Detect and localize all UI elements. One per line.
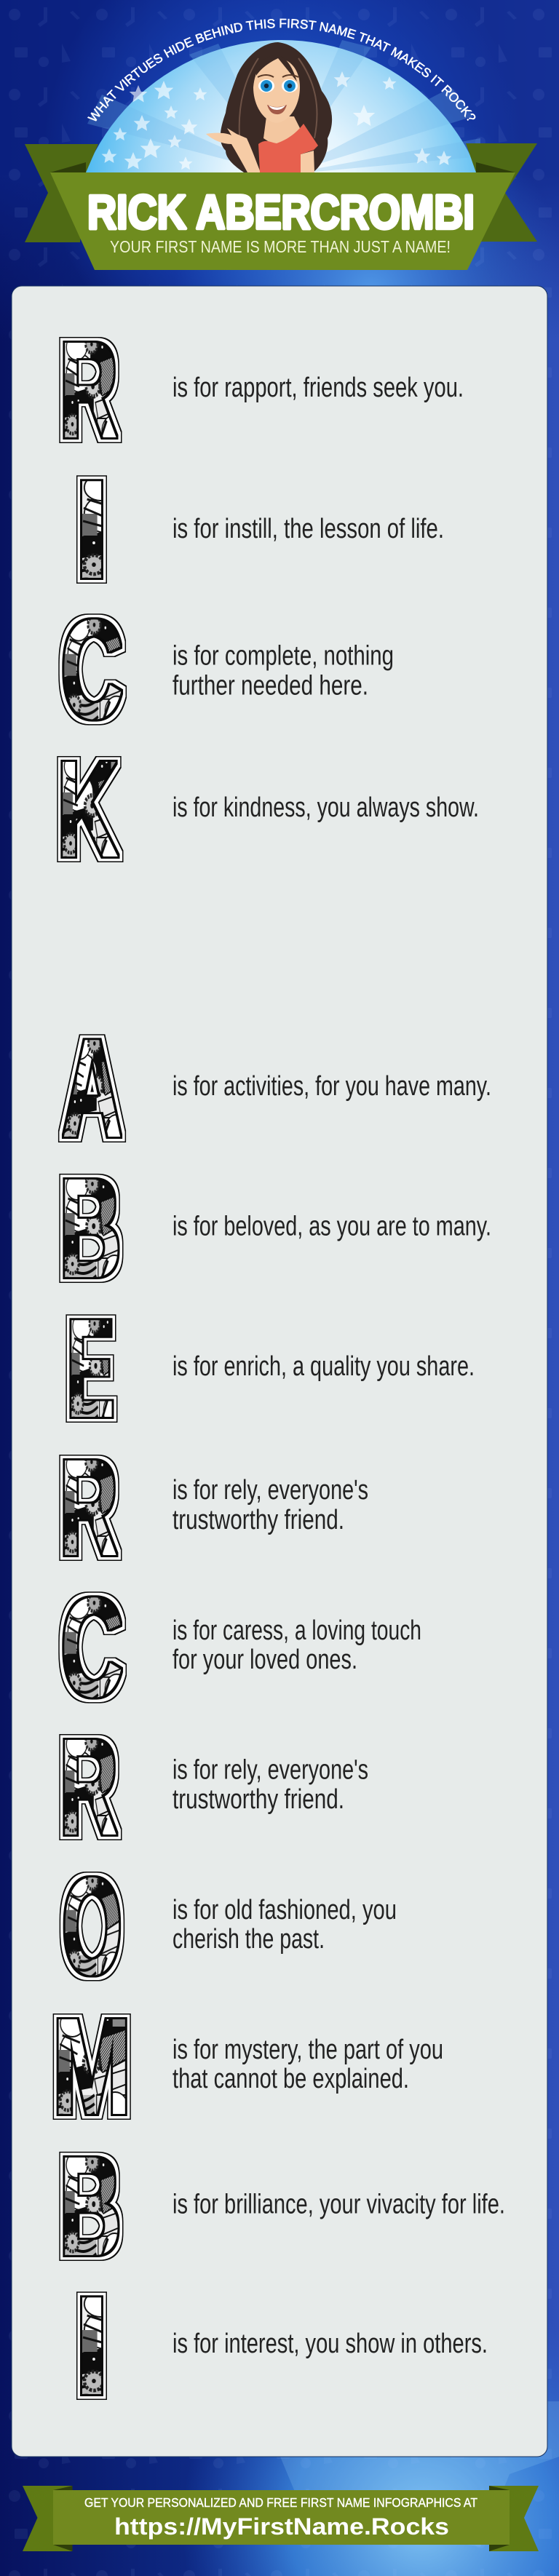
text — [173, 640, 394, 701]
row: M mystery — [52, 1990, 443, 2144]
neck and arm — [263, 116, 300, 143]
text: is for rapport, friends seek you. — [173, 373, 464, 403]
arched tagline: WHAT VIRTUES HIDE BEHIND THIS FIRST NAME THAT MAKES IT ROCK? — [87, 19, 476, 122]
row: B brilliance — [59, 2128, 505, 2286]
footer folds — [53, 2486, 73, 2551]
letter C: C — [60, 591, 123, 749]
face — [253, 58, 300, 123]
row: E enrich — [67, 1290, 475, 1447]
text: is for complete, nothing — [173, 640, 394, 671]
text: is for mystery, the part of you — [173, 2035, 443, 2065]
row: R rely — [60, 1710, 368, 1864]
row: I interest — [74, 2267, 488, 2424]
ribbon main — [50, 172, 515, 270]
text — [173, 1755, 368, 1815]
letter R: R — [60, 1710, 118, 1864]
text: is for instill, the lesson of life. — [173, 514, 444, 544]
letter O: O — [62, 1849, 122, 2003]
row: R rely — [60, 1431, 368, 1584]
text: is for rely, everyone's — [173, 1755, 368, 1786]
text: that cannot be explained. — [173, 2064, 409, 2094]
text — [173, 1615, 421, 1675]
subtitle: YOUR FIRST NAME IS MORE THAN JUST A NAME! — [110, 237, 451, 256]
letter M: M — [52, 1990, 132, 2144]
letter R: R — [60, 313, 118, 466]
letter B: B — [59, 1150, 122, 1308]
row: K kindness — [57, 733, 479, 886]
letter K: K — [57, 733, 119, 886]
dome circle — [86, 40, 476, 172]
text: trustworthy friend. — [173, 1505, 344, 1535]
header: dome with character — [86, 40, 480, 172]
row: B beloved — [59, 1150, 491, 1308]
footer ribbon — [23, 2486, 539, 2551]
row: C caress — [60, 1569, 421, 1727]
text: is for enrich, a quality you share. — [173, 1351, 475, 1382]
row: O old fashioned — [62, 1849, 397, 2003]
text — [173, 1475, 368, 1535]
text: for your loved ones. — [173, 1645, 357, 1675]
shirt — [258, 124, 318, 172]
footer tails — [23, 2486, 73, 2551]
eyes — [258, 79, 274, 92]
ribbon tails — [25, 144, 98, 242]
character — [206, 42, 332, 172]
letter A: A — [62, 1009, 122, 1166]
text: cherish the past. — [173, 1924, 325, 1955]
title: RICK ABERCROMBI — [87, 185, 475, 239]
letter B: B — [59, 2128, 122, 2286]
row: C complete — [60, 591, 394, 749]
letter I: I — [74, 2267, 110, 2424]
footer url: https://MyFirstName.Rocks — [114, 2513, 449, 2540]
text: is for rely, everyone's — [173, 1475, 368, 1506]
text: further needed here. — [173, 671, 368, 701]
row: I instill — [74, 450, 444, 608]
text: is for old fashioned, you — [173, 1895, 397, 1925]
ribbon folds — [50, 162, 86, 172]
letter R: R — [60, 1431, 118, 1584]
rays and stars — [87, 40, 480, 175]
letter I: I — [74, 450, 110, 608]
row: A activities — [62, 1009, 491, 1166]
mouth — [267, 105, 287, 114]
text: is for caress, a loving touch — [173, 1615, 421, 1646]
footer main — [53, 2490, 510, 2545]
header ribbon — [25, 143, 537, 270]
letter C: C — [60, 1569, 123, 1727]
text: trustworthy friend. — [173, 1784, 344, 1815]
hair — [221, 42, 332, 172]
text — [173, 2035, 443, 2094]
letter E: E — [67, 1290, 114, 1447]
text — [173, 1895, 397, 1955]
row: R rapport — [60, 313, 464, 466]
footer line 1: GET YOUR PERSONALIZED AND FREE FIRST NAME INFOGRAPHICS AT — [84, 2495, 477, 2510]
